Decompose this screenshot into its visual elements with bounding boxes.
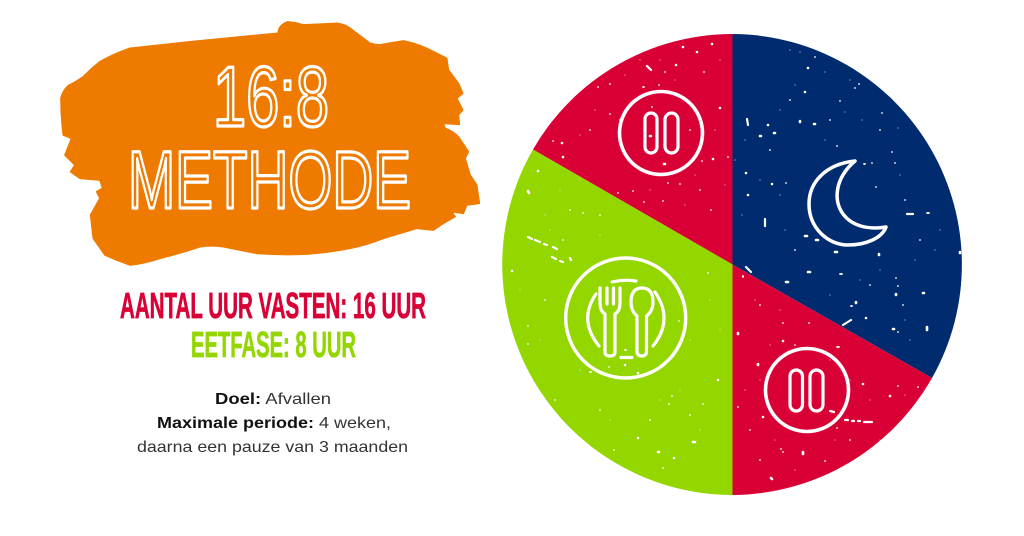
fork <box>600 288 620 356</box>
text: eating phase: EETFASE: 8 UUR <box>191 324 356 365</box>
speckle texture <box>512 44 960 479</box>
text: fasting hours: AANTAL UUR VASTEN: 16 UUR <box>120 285 426 326</box>
line: maximum period: Maximale periode: 4 weken, <box>157 415 391 432</box>
orange brush shape <box>61 22 479 265</box>
panel: title brush stroke <box>61 22 479 265</box>
text: goal and period <box>137 391 408 456</box>
slice: fasting top <box>533 34 732 264</box>
chart: 16:8 pie clock <box>502 34 962 495</box>
icon: plate with fork and spoon <box>566 258 686 378</box>
icon: pause top <box>620 92 702 174</box>
icon: pause bottom <box>766 348 848 432</box>
heading: METHODE: METHODE <box>128 135 411 226</box>
line: pause: daarna een pauze van 3 maanden <box>137 439 408 456</box>
spoon <box>631 288 653 356</box>
slice: night <box>732 34 962 378</box>
line: goal: Doel: Afvallen <box>215 391 331 408</box>
heading: 16:8: 16:8 <box>213 50 329 145</box>
slice: fasting bottom <box>732 264 932 495</box>
slice: eating phase <box>502 150 732 495</box>
icon: moon <box>809 161 886 245</box>
